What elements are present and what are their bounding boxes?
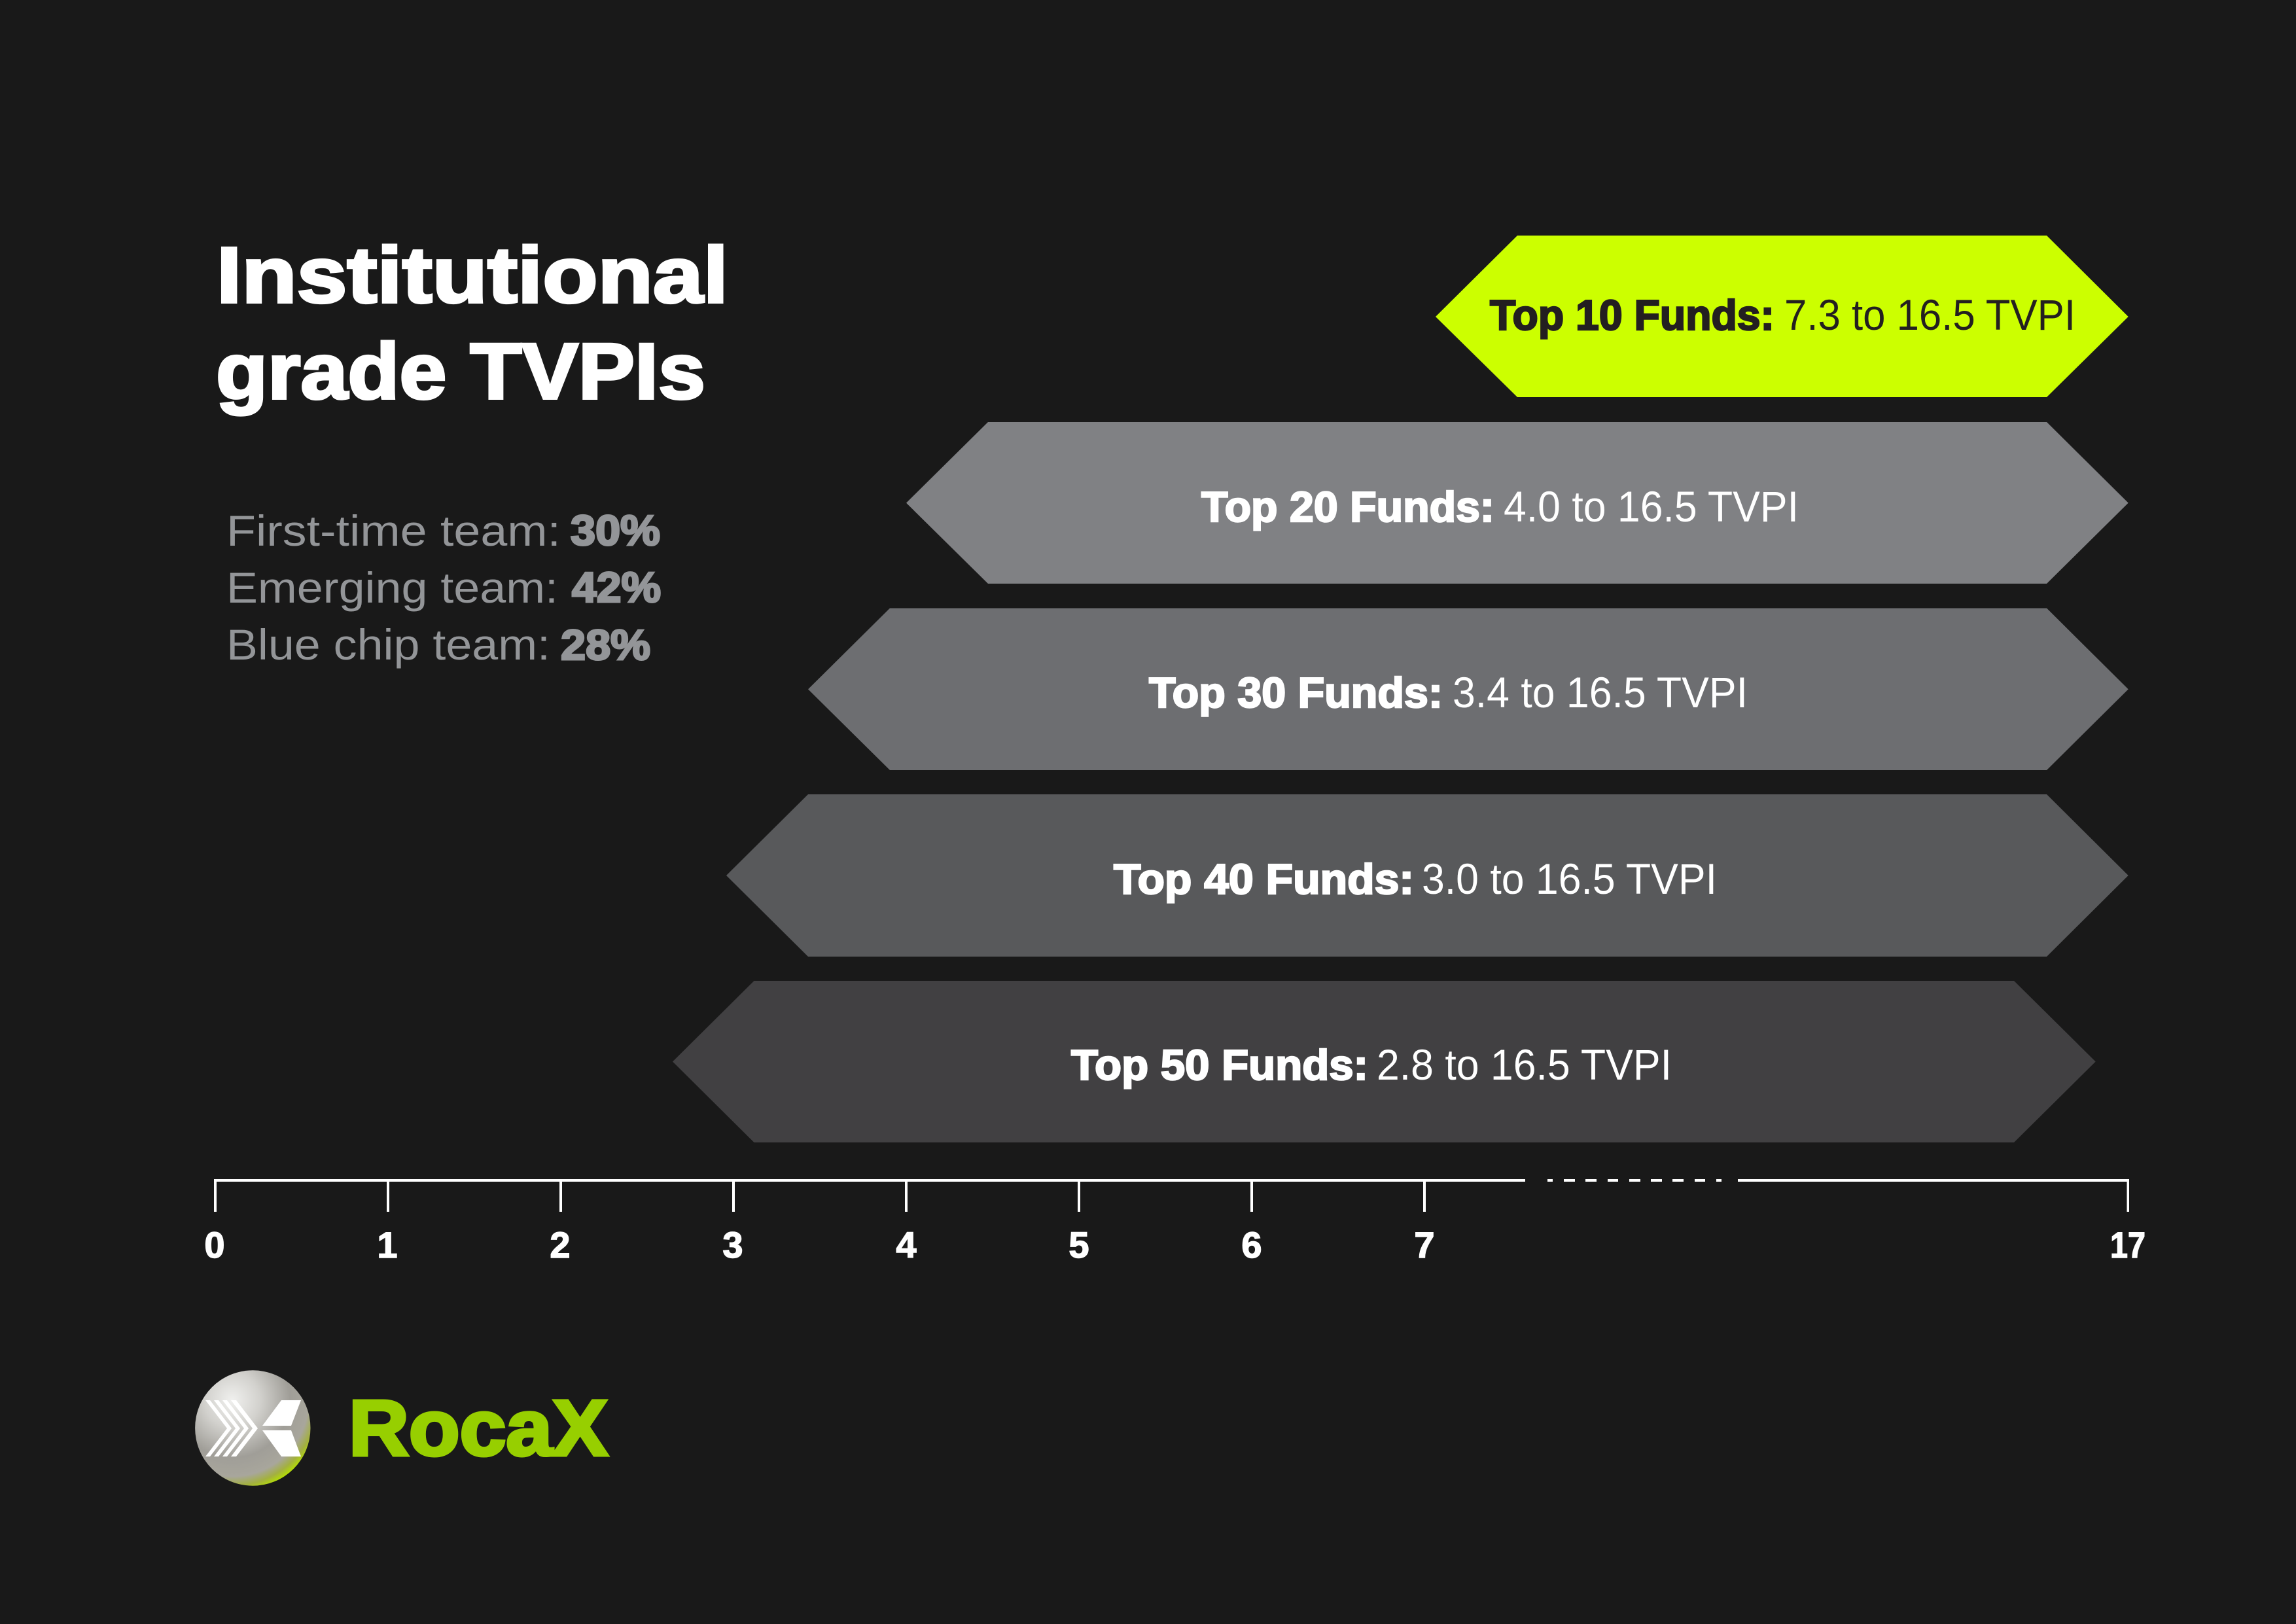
axis labels: 2: [550, 1224, 571, 1265]
stat: emerging team: 42%: [572, 563, 661, 611]
axis labels: 6: [1241, 1224, 1262, 1265]
stat: first-time team: [226, 506, 660, 555]
bar: top 40 funds: 3.0 to 16.5 TVPI: [1422, 855, 1717, 903]
bar: top 20 funds: 4.0 to 16.5 TVPI: [1504, 482, 1799, 531]
bar: top 10 funds: Top 10 Funds:: [1490, 291, 1775, 339]
team mix statistics: [226, 506, 661, 669]
bar: top 30 funds: Top 30 Funds:: [1149, 669, 1443, 716]
axis labels: 7: [1414, 1224, 1435, 1265]
axis labels: 5: [1069, 1224, 1089, 1265]
bar: top 30 funds: 3.4 to 16.5 TVPI: [1453, 668, 1748, 716]
axis labels: 1: [377, 1224, 398, 1265]
stat: first-time team: 30%: [571, 506, 660, 554]
axis labels: 0: [204, 1224, 225, 1265]
bar: top 20 funds: [906, 422, 2128, 584]
bar: top 20 funds: Top 20 Funds:: [1201, 483, 1494, 531]
axis labels: 3: [722, 1224, 743, 1265]
title: [216, 230, 728, 415]
bar: top 30 funds: [808, 609, 2128, 770]
bar: top 40 funds: Top 40 Funds:: [1114, 855, 1414, 903]
axis labels: 4: [896, 1224, 917, 1265]
bar: top 10 funds: 7.3 to 16.5 TVPI: [1784, 291, 2075, 339]
bar: top 50 funds: [673, 981, 2096, 1142]
title: Institutional: [217, 230, 728, 319]
title: grade TVPIs: [216, 327, 705, 415]
bar: top 50 funds: Top 50 Funds:: [1071, 1041, 1368, 1089]
logo: RocaX: [195, 1370, 608, 1486]
bar: top 50 funds: 2.8 to 16.5 TVPI: [1377, 1040, 1672, 1089]
axis labels: 17: [2110, 1224, 2146, 1265]
stat: first-time team: First-time team:: [226, 506, 561, 555]
x-axis scale: [204, 1179, 2146, 1265]
stat: emerging team: Emerging team:: [226, 563, 558, 612]
bar chart: TVPI ranges: [673, 236, 2128, 1142]
icon: RocaX orb: [195, 1370, 310, 1486]
stat: blue chip team: 28%: [561, 621, 650, 669]
stat: blue chip team: Blue chip team:: [226, 620, 550, 669]
axis labels: [204, 1224, 2146, 1265]
wordmark: RocaX: [349, 1383, 608, 1472]
bar: top 10 funds: [1436, 236, 2128, 397]
bar: top 40 funds: [726, 794, 2128, 957]
